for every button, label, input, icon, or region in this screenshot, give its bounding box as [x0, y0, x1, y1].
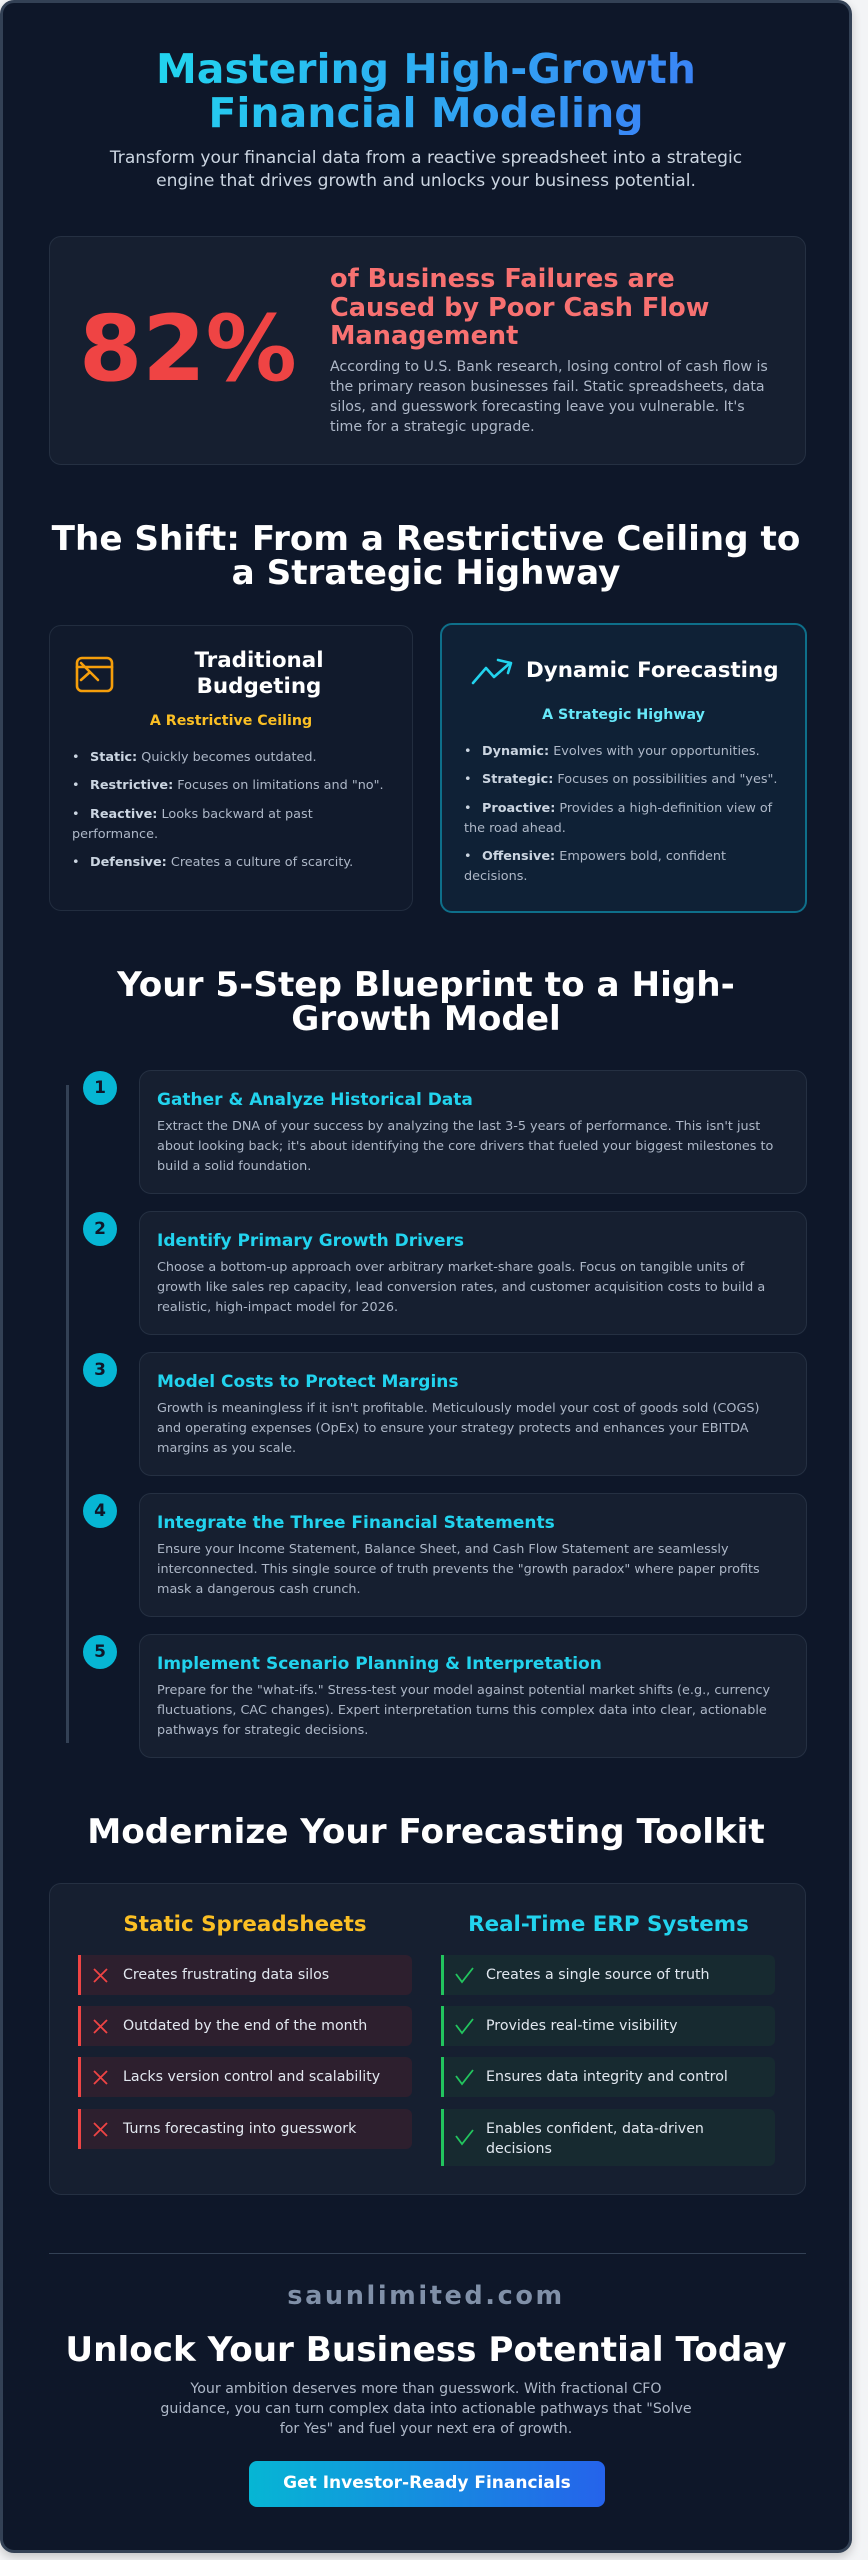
step 5 text	[157, 1683, 770, 1738]
step 3 number	[83, 1353, 117, 1387]
stat heading: of Business Failures are	[330, 264, 675, 294]
item: outdated: Outdated by the end of the month	[123, 2018, 367, 2034]
card heading: traditional budgeting: Traditional	[194, 648, 324, 673]
item: data silos: Creates frustrating data silos	[123, 1967, 329, 1983]
title: Financial Modeling	[208, 89, 644, 137]
heading: blueprint	[116, 965, 735, 1039]
list: traditional budgeting traits: Static: Quickly becomes outdated.	[90, 750, 317, 765]
list: dynamic forecasting traits	[464, 744, 777, 884]
heading: toolkit: Modernize Your Forecasting Toolkit	[87, 1812, 765, 1852]
stat heading: Management	[330, 321, 518, 351]
step 2 number	[83, 1212, 117, 1246]
card heading: traditional budgeting: Budgeting	[197, 674, 321, 699]
step 2 text	[157, 1260, 765, 1315]
footer text	[160, 2381, 692, 2437]
step 2 text: Choose a bottom-up approach over arbitrary market-share goals. Focus on tangible units of	[157, 1260, 744, 1275]
subtitle: Transform your financial data from a reactive spreadsheet into a strategic	[110, 148, 742, 168]
step 4 text: interconnected. This single source of truth prevents the "growth paradox" where paper profits	[157, 1562, 760, 1577]
step 3 title: Model Costs to Protect Margins	[157, 1372, 458, 1392]
footer text: for Yes" and fuel your next era of growth.	[280, 2421, 572, 2437]
step 2 title: Identify Primary Growth Drivers	[157, 1231, 464, 1251]
stat description	[330, 359, 768, 435]
big number: 82%	[79, 297, 297, 402]
panel: traditional budgeting	[49, 625, 413, 911]
list: traditional budgeting traits: Restrictive: Focuses on limitations and "no".	[90, 778, 384, 793]
step 2 text: realistic, high-impact model for 2026.	[157, 1300, 398, 1315]
footer divider	[49, 2253, 806, 2254]
list: dynamic forecasting traits: Offensive: Empowers bold, confident	[482, 849, 726, 864]
heading: blueprint: Growth Model	[291, 999, 561, 1039]
step 3 card	[139, 1352, 807, 1476]
stat heading	[330, 264, 709, 351]
step 1 number: 1	[94, 1078, 106, 1098]
button	[249, 2461, 605, 2507]
list: dynamic forecasting traits: Proactive: Provides a high-definition view of	[482, 801, 772, 816]
list: traditional budgeting traits: •	[72, 855, 80, 870]
title: Mastering High-Growth	[156, 45, 696, 93]
card heading: traditional budgeting	[194, 648, 324, 699]
column heading: static spreadsheets: Static Spreadsheets	[123, 1912, 367, 1937]
icon: budgeting window	[76, 656, 114, 692]
list: dynamic forecasting traits: •	[464, 772, 472, 787]
step 3 number: 3	[94, 1360, 106, 1380]
panel: 82% statistic	[49, 236, 806, 465]
list: traditional budgeting traits: Defensive: Creates a culture of scarcity.	[90, 855, 353, 870]
footer text: guidance, you can turn complex data into actionable pathways that "Solve	[160, 2401, 692, 2417]
list: dynamic forecasting traits: Dynamic: Evolves with your opportunities.	[482, 744, 760, 759]
button: Get Investor-Ready Financials	[283, 2473, 571, 2493]
column heading: real-time ERP: Real-Time ERP Systems	[468, 1912, 749, 1937]
list: dynamic forecasting traits: •	[464, 801, 472, 816]
step 4 number	[83, 1494, 117, 1528]
step 1 text: about looking back; it's about identifying the core drivers that fueled your biggest milestones to	[157, 1139, 773, 1154]
step 1 number	[83, 1071, 117, 1105]
step 2 number: 2	[94, 1219, 106, 1239]
item: integrity: Ensures data integrity and control	[486, 2069, 728, 2085]
icon: trending arrow	[472, 658, 512, 684]
step 5 text: pathways for strategic decisions.	[157, 1723, 368, 1738]
timeline line	[66, 1085, 69, 1743]
step 5 text: fluctuations, CAC changes). Expert interpretation turns this complex data into clear, actionable	[157, 1703, 767, 1718]
item: version control: Lacks version control and scalability	[123, 2069, 380, 2085]
step 4 text: Ensure your Income Statement, Balance Sheet, and Cash Flow Statement are seamlessly	[157, 1542, 729, 1557]
step 3 text: margins as you scale.	[157, 1441, 296, 1456]
step 3 text: Growth is meaningless if it isn't profitable. Meticulously model your cost of goods sold (COGS)	[157, 1401, 760, 1416]
step 5 card	[139, 1634, 807, 1758]
stat heading: Caused by Poor Cash Flow	[330, 292, 709, 322]
card subheading: restrictive ceiling: A Restrictive Ceiling	[150, 713, 312, 729]
list: dynamic forecasting traits: •	[464, 744, 472, 759]
list: traditional budgeting traits: •	[72, 778, 80, 793]
step 2 text: growth like sales rep capacity, lead conversion rates, and customer acquisition costs to build a	[157, 1280, 765, 1295]
item: guesswork: Turns forecasting into guesswork	[123, 2121, 356, 2137]
stat description: According to U.S. Bank research, losing control of cash flow is	[330, 359, 768, 375]
item: confident decisions: Enables confident, data-driven	[486, 2121, 704, 2137]
step 5 title: Implement Scenario Planning & Interpretation	[157, 1654, 602, 1674]
step 1 text: build a solid foundation.	[157, 1159, 311, 1174]
item: single source	[441, 1955, 775, 1995]
heading: the shift: a Strategic Highway	[232, 553, 620, 593]
brand: saunlimited.com	[287, 2281, 565, 2311]
panel: toolkit comparison	[49, 1883, 806, 2195]
step 4 card	[139, 1493, 807, 1617]
item: single source: Creates a single source of truth	[486, 1967, 710, 1983]
list: dynamic forecasting traits: decisions.	[464, 869, 528, 884]
step 5 text: Prepare for the "what-ifs." Stress-test your model against potential market shifts (e.g., currency	[157, 1683, 770, 1698]
list: dynamic forecasting traits: the road ahead.	[464, 821, 566, 836]
card heading: dynamic forecasting: Dynamic Forecasting	[526, 658, 779, 683]
subtitle	[110, 148, 742, 191]
step 1 text: Extract the DNA of your success by analyzing the last 3-5 years of performance. This isn't just	[157, 1119, 760, 1134]
stat description: time for a strategic upgrade.	[330, 419, 535, 435]
item: visibility	[441, 2006, 775, 2046]
stat description: the primary reason businesses fail. Static spreadsheets, data	[330, 379, 765, 395]
panel: dynamic forecasting	[440, 623, 807, 913]
list: traditional budgeting traits: performance.	[72, 827, 158, 842]
step 4 text: mask a dangerous cash crunch.	[157, 1582, 361, 1597]
list: traditional budgeting traits: •	[72, 807, 80, 822]
item: integrity	[441, 2057, 775, 2097]
heading: blueprint: Your 5-Step Blueprint to a High-	[117, 965, 735, 1005]
heading: the shift	[52, 519, 800, 593]
step 4 text	[157, 1542, 760, 1597]
list: traditional budgeting traits: •	[72, 750, 80, 765]
stat description: silos, and guesswork forecasting leave you vulnerable. It's	[330, 399, 745, 415]
step 2 card	[139, 1211, 807, 1335]
step 3 text: and operating expenses (OpEx) to ensure your strategy protects and enhances your EBITDA	[157, 1421, 748, 1436]
item: outdated	[78, 2006, 412, 2046]
step 1 card	[139, 1070, 807, 1194]
item: visibility: Provides real-time visibility	[486, 2018, 678, 2034]
subtitle: engine that drives growth and unlocks your business potential.	[156, 171, 696, 191]
list: dynamic forecasting traits: •	[464, 849, 472, 864]
footer text: Your ambition deserves more than guesswork. With fractional CFO	[190, 2381, 662, 2397]
step 4 title: Integrate the Three Financial Statements	[157, 1513, 555, 1533]
title	[0, 47, 852, 135]
step 3 text	[157, 1401, 760, 1456]
footer heading: Unlock Your Business Potential Today	[65, 2330, 787, 2370]
item: confident decisions	[441, 2109, 775, 2166]
step 5 number: 5	[94, 1642, 106, 1662]
item: version control	[78, 2057, 412, 2097]
step 5 number	[83, 1635, 117, 1669]
item: confident decisions: decisions	[486, 2141, 552, 2157]
step 1 text	[157, 1119, 773, 1174]
heading: the shift: The Shift: From a Restrictive Ceiling to	[52, 519, 800, 559]
item: data silos	[78, 1955, 412, 1995]
step 4 number: 4	[94, 1501, 106, 1521]
list: traditional budgeting traits: Reactive: Looks backward at past	[90, 807, 313, 822]
step 1 title: Gather & Analyze Historical Data	[157, 1090, 473, 1110]
item: guesswork	[78, 2109, 412, 2149]
card subheading: strategic highway: A Strategic Highway	[542, 707, 705, 723]
list: dynamic forecasting traits: Strategic: Focuses on possibilities and "yes".	[482, 772, 777, 787]
list: traditional budgeting traits	[72, 750, 384, 870]
